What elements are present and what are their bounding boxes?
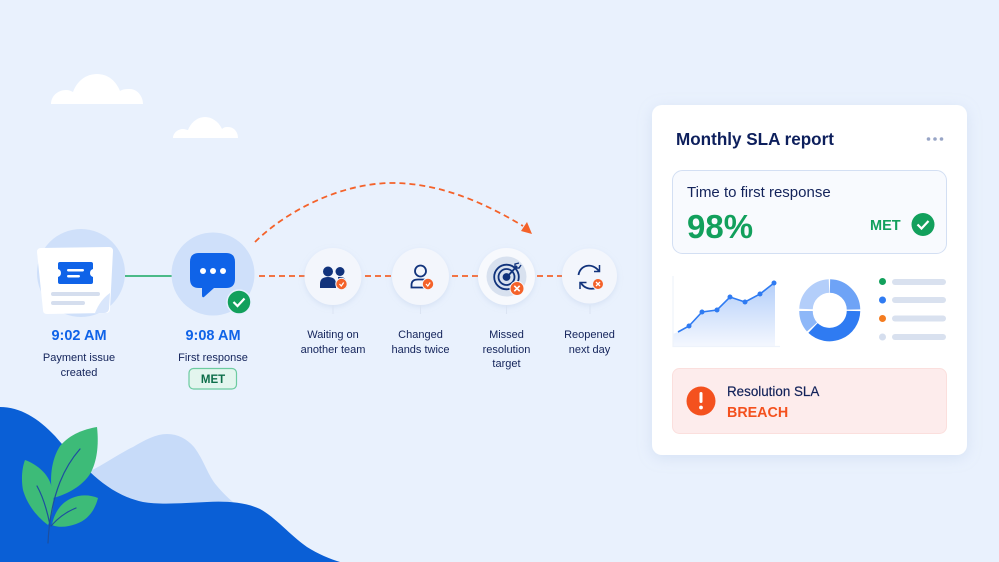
chart: donut — [806, 286, 854, 335]
label: first response: First response — [178, 352, 248, 364]
plant stems — [37, 449, 80, 543]
time: 9:08 AM: 9:08 AM — [185, 328, 241, 344]
step: reopened next day — [562, 248, 617, 356]
cloud: small — [173, 117, 238, 138]
icon: alert — [686, 386, 716, 416]
icon: green check — [912, 213, 934, 236]
badge: MET — [189, 368, 236, 389]
icon: menu dots — [927, 137, 943, 141]
icon: ticket on paper — [37, 229, 125, 317]
status: BREACH: BREACH — [727, 405, 788, 421]
icon: chat bubble with check — [172, 232, 254, 316]
panel: monthly SLA report — [652, 105, 967, 455]
icon: person with orange badge — [392, 248, 449, 305]
label: waiting on another team: another team — [301, 344, 365, 356]
cloud: large — [51, 74, 143, 104]
label: missed resolution target: Missed — [489, 329, 524, 341]
leaf: lower right — [52, 495, 98, 527]
connector: green line — [125, 275, 172, 277]
panel: time to first response — [672, 170, 946, 254]
time: 9:02 AM: 9:02 AM — [51, 328, 107, 344]
label: resolution SLA: Resolution SLA — [727, 384, 819, 399]
step: waiting on another team — [301, 248, 365, 356]
label: time to first response: Time to first response — [687, 184, 831, 201]
label: reopened next day: next day — [569, 344, 611, 356]
legend — [879, 278, 946, 340]
panel: resolution SLA breach — [672, 368, 946, 434]
label: missed resolution target: resolution — [483, 344, 530, 356]
label: reopened next day: Reopened — [564, 329, 615, 341]
step: first response — [172, 232, 254, 389]
label: changed hands twice: hands twice — [391, 344, 450, 356]
label: payment issue created: created — [61, 367, 97, 379]
background hill: light — [90, 434, 233, 515]
label: missed resolution target: target — [492, 358, 521, 370]
arrow: dashed arc to missed resolution target — [255, 183, 532, 242]
leaf: left — [22, 460, 54, 525]
heading: monthly SLA report: Monthly SLA report — [676, 130, 834, 149]
label: changed hands twice: Changed — [398, 329, 443, 341]
label: payment issue created: Payment issue — [43, 352, 115, 364]
connector: orange dashed timeline — [259, 275, 562, 277]
leaf: top — [51, 427, 98, 498]
value: 98%: 98% — [687, 208, 753, 245]
step: changed hands twice — [391, 248, 450, 356]
plant illustration — [22, 427, 98, 543]
badge: MET: MET — [201, 374, 225, 386]
step: missed resolution target — [478, 248, 535, 370]
label: waiting on another team: Waiting on — [307, 329, 359, 341]
chart: line trend — [673, 276, 780, 346]
icon: target with x badge — [478, 248, 535, 305]
step: payment issue created — [37, 229, 125, 379]
icon: two people with orange badge — [304, 248, 362, 305]
icon: refresh arrows with x badge — [562, 248, 617, 304]
status: MET: MET — [870, 218, 901, 234]
foreground hill: blue — [0, 407, 340, 562]
